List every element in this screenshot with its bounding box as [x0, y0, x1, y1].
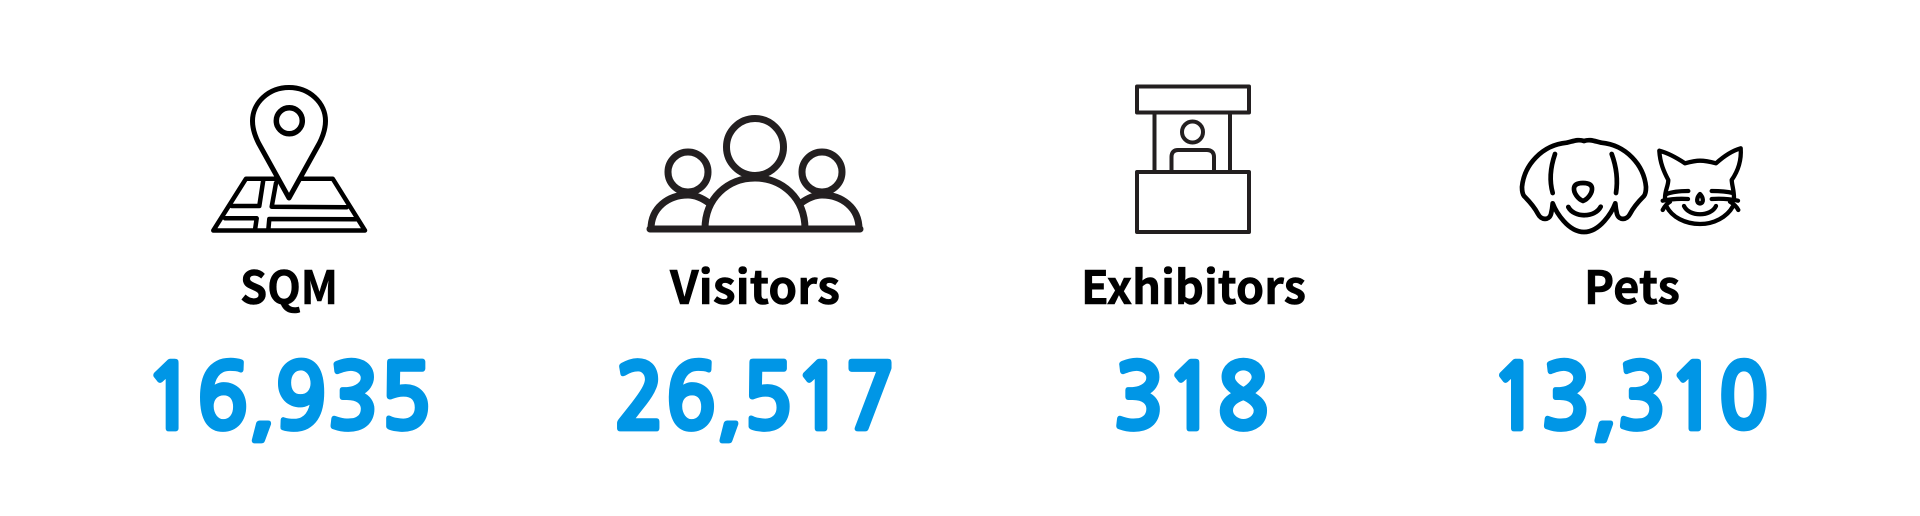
panel: Exhibitors — [1081, 86, 1306, 443]
icon: group of people — [650, 118, 860, 229]
dog face — [1522, 140, 1646, 232]
cat face — [1659, 148, 1741, 224]
label: Pets: Pets — [1584, 252, 1680, 318]
value: 318: 318 — [1113, 354, 1269, 443]
label: Exhibitors: Exhibitors — [1081, 252, 1306, 318]
value: 16,935: 16,935 — [144, 354, 432, 443]
icon: exhibitor booth — [1137, 86, 1249, 232]
panel: SQM — [144, 87, 432, 443]
panel: Pets — [1490, 140, 1769, 443]
value: 26,517: 26,517 — [614, 354, 896, 443]
icon: dog and cat faces — [1522, 140, 1741, 232]
value: 13,310: 13,310 — [1490, 354, 1769, 443]
label: Visitors: Visitors — [669, 252, 840, 318]
icon: map with location pin — [213, 87, 365, 230]
label: SQM: SQM — [240, 252, 338, 318]
panel: Visitors — [614, 118, 896, 443]
